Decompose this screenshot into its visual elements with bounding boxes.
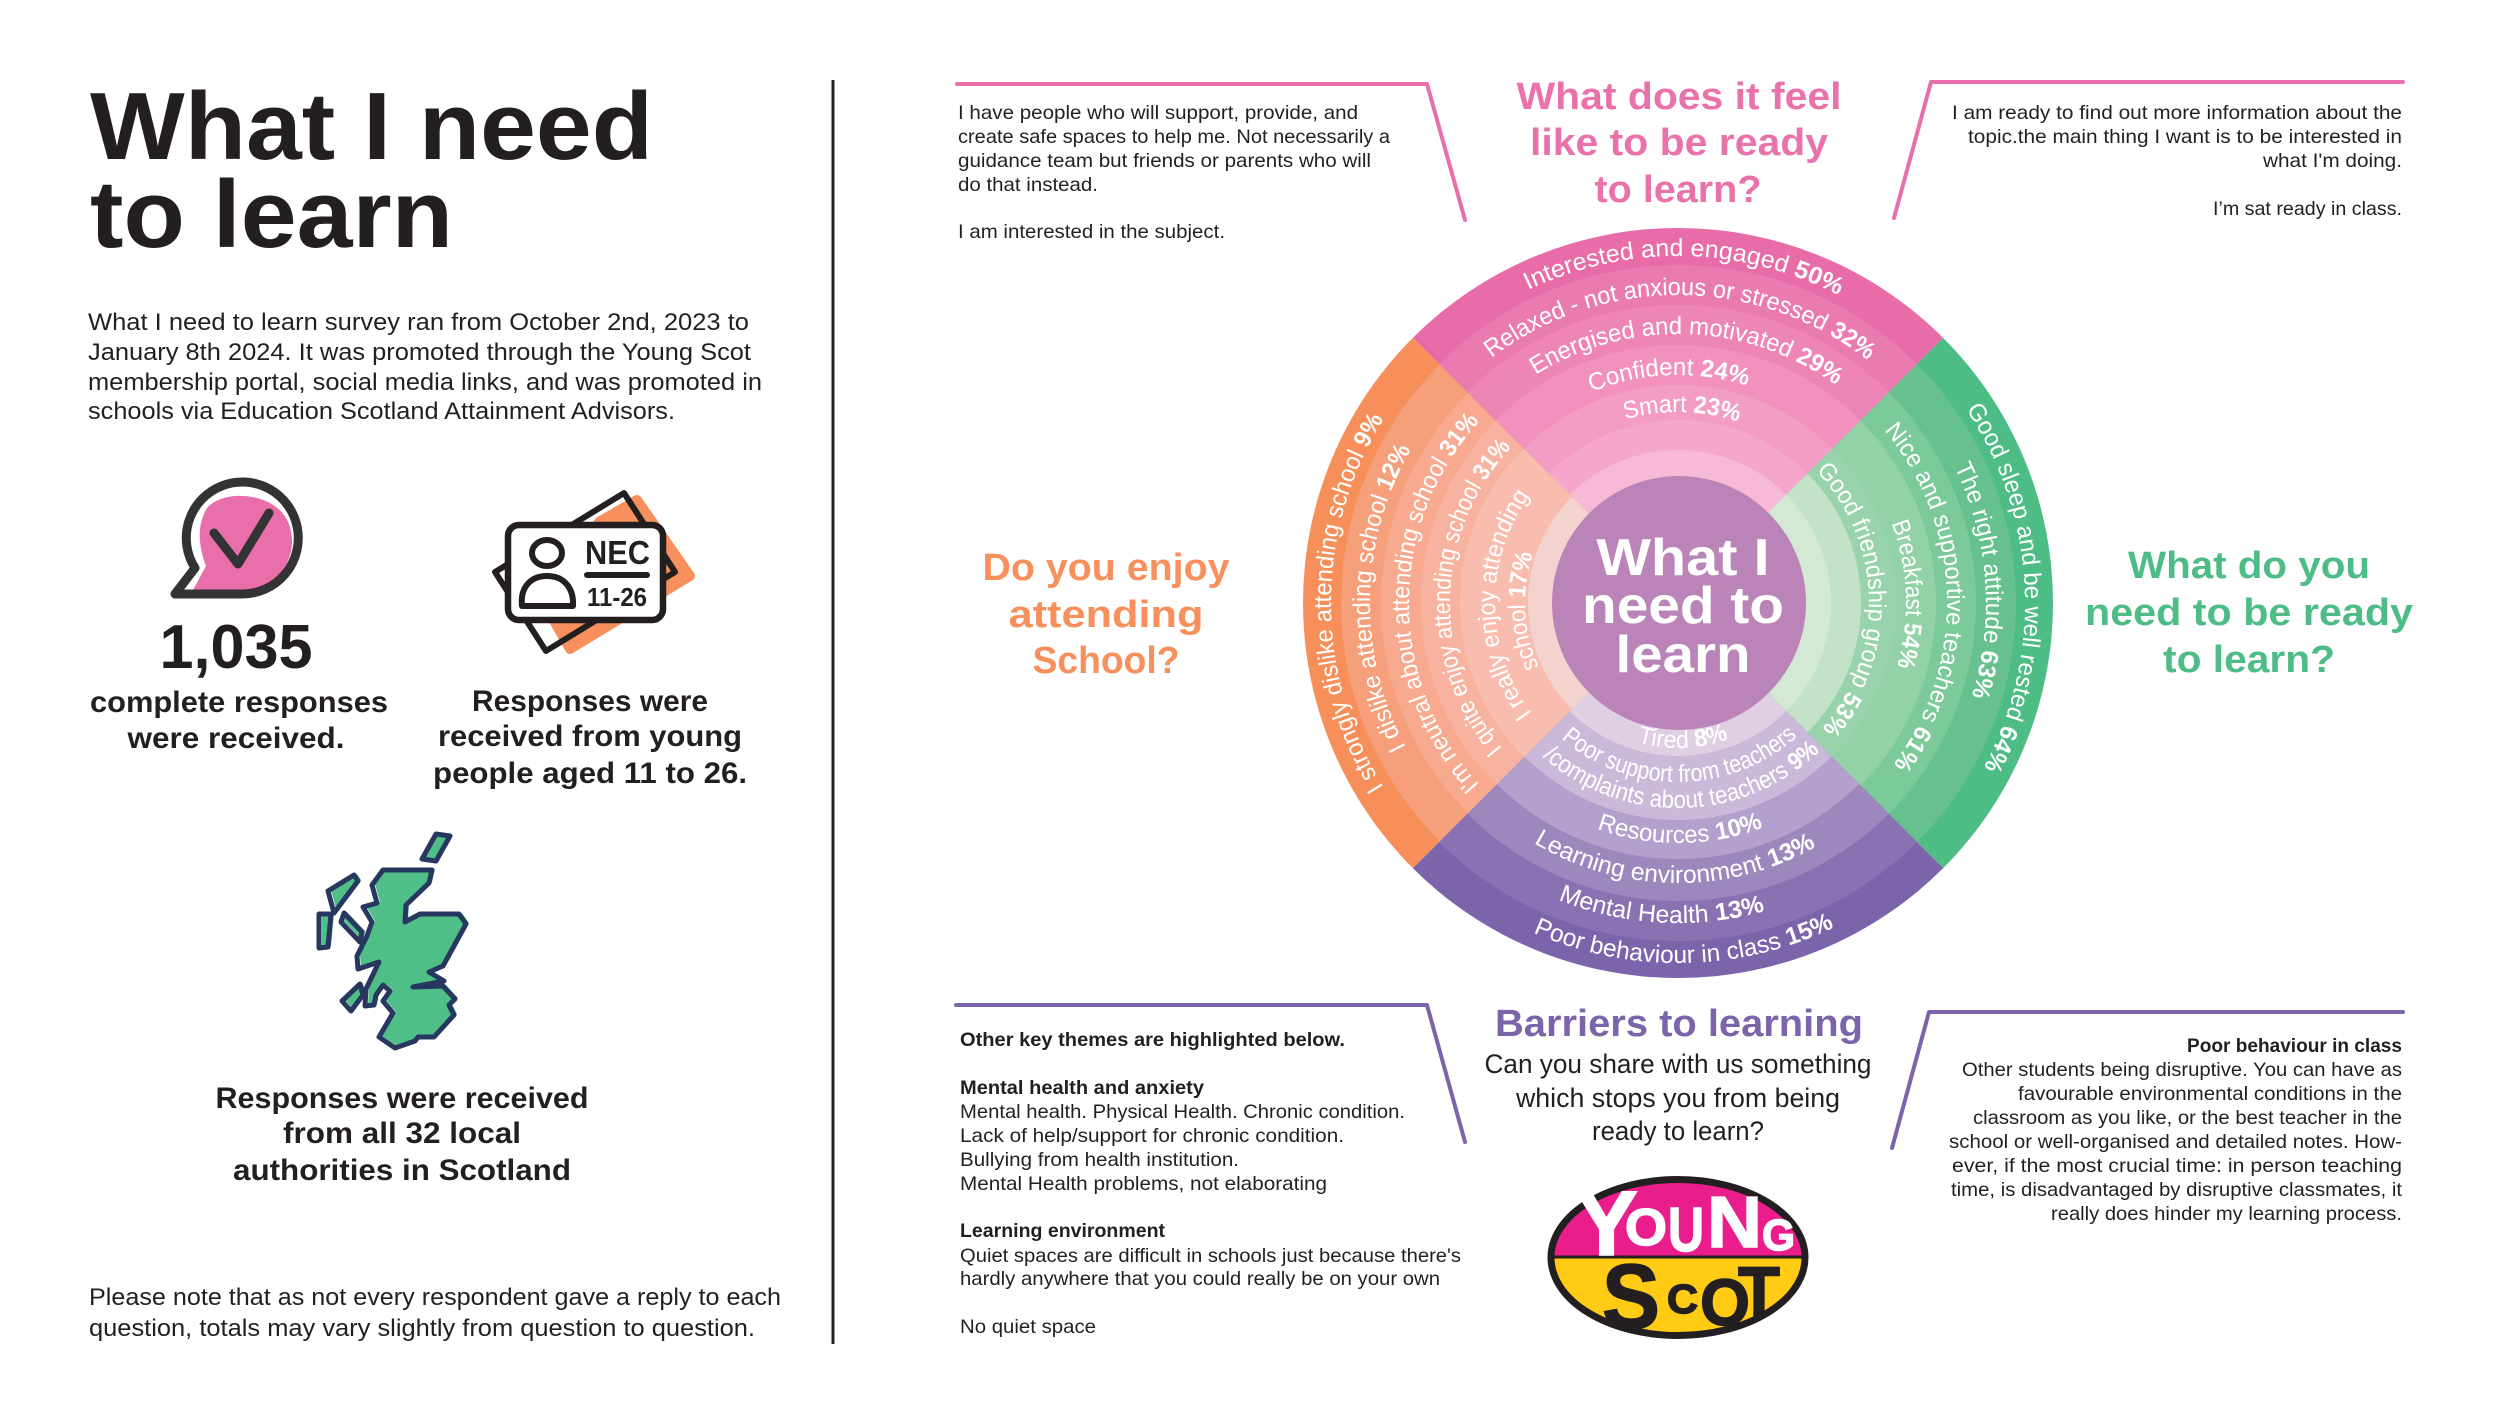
quote callout: top right: what I'm doing. [2262, 150, 2402, 172]
statistic: age range: received from young [438, 720, 742, 753]
icon: young scot age card: 11-26 [587, 582, 647, 612]
callout: other key themes: Other key themes are highlighted below. [960, 1029, 1345, 1051]
heading: barriers to learning [1484, 1003, 1872, 1146]
logo: young scot: O [1700, 1265, 1750, 1339]
heading: barriers to learning: Can you share with us something [1484, 1049, 1872, 1079]
labels: orange segment: I quite enjoy attending school 31% [1433, 439, 1510, 758]
callout: other key themes: hardly anywhere that you could really be on your own [960, 1268, 1440, 1290]
callout: poor behaviour quote: really does hinder my learning process. [2051, 1203, 2402, 1225]
labels: purple segment: Resources 10% [1598, 812, 1762, 844]
labels: pink segment [1483, 238, 1875, 421]
labels: orange segment: school 17% [1507, 552, 1538, 670]
quote callout: top left: create safe spaces to help me. Not necessarily a [958, 126, 1390, 148]
labels: pink segment: Relaxed - not anxious or stressed 32% [1483, 278, 1875, 359]
callout: other key themes: Mental health. Physical Health. Chronic condition. [960, 1101, 1405, 1123]
labels: green segment [1820, 404, 2042, 772]
labels: green segment: Good sleep and be well rested 64% [1969, 404, 2042, 772]
labels: green segment: Good friendship group 53% [1820, 464, 1887, 736]
logo: young scot: N [1707, 1183, 1762, 1263]
statistic: complete responses: complete responses [90, 686, 388, 719]
callout: other key themes: Quiet spaces are difficult in schools just because there's [960, 1245, 1461, 1267]
quote callout: top right: topic.the main thing I want is to be interested in [1968, 126, 2402, 148]
heading: what do you need: What do you [2128, 545, 2370, 587]
labels: purple segment: Mental Health 13% [1560, 884, 1764, 924]
title: to learn [90, 161, 453, 268]
logo: young scot: Y [1575, 1173, 1638, 1275]
callout: other key themes: No quiet space [960, 1316, 1096, 1338]
heading: what do you need: to learn? [2163, 639, 2335, 681]
labels: orange segment: I dislike attending school 12% [1352, 445, 1410, 753]
labels: green segment: Breakfast 54% [1892, 519, 1923, 668]
quote callout: top right: I’m sat ready in class. [2213, 198, 2402, 220]
callout: other key themes: Learning environment [960, 1220, 1166, 1242]
title [90, 73, 653, 268]
labels: orange segment: I strongly dislike attending school 9% [1315, 414, 1383, 794]
callout: poor behaviour quote [1892, 1012, 2403, 1225]
segment: enjoy school (orange) [1303, 338, 1589, 868]
logo: young scot: S [1602, 1246, 1660, 1348]
intro paragraph: What I need to learn survey ran from October 2nd, 2023 to [88, 309, 749, 336]
labels: green segment: Nice and supportive teachers 61% [1886, 421, 1965, 771]
quote callout: top left: I have people who will support, provide, and [958, 102, 1358, 124]
footnote [89, 1284, 781, 1342]
callout: poor behaviour quote: classroom as you like, or the best teacher in the [1973, 1107, 2402, 1129]
icon: map of scotland [319, 833, 469, 1048]
heading: what does it feel like: to learn? [1594, 169, 1762, 211]
heading: do you enjoy attending school: Do you enjoy [982, 547, 1230, 589]
logo: young scot: O [1625, 1199, 1667, 1257]
logo: young scot [1545, 1173, 1811, 1348]
segment: barriers (purple) [1412, 692, 1944, 978]
heading: do you enjoy attending school: School? [1032, 640, 1180, 682]
center circle: learn [1616, 626, 1750, 684]
labels: purple segment: Poor support from teachers [1562, 726, 1796, 783]
title: What I need [90, 73, 653, 180]
callout: other key themes: Lack of help/support for chronic condition. [960, 1125, 1344, 1147]
intro paragraph: January 8th 2024. It was promoted through the Young Scot [88, 339, 751, 366]
callout: other key themes [956, 1005, 1465, 1338]
statistic: local authorities: from all 32 local [283, 1117, 521, 1150]
logo: young scot: C [1667, 1276, 1698, 1322]
center circle: need to [1582, 577, 1784, 635]
statistic: age range [433, 685, 747, 790]
heading: barriers to learning: ready to learn? [1592, 1116, 1764, 1146]
segment: feeling ready (pink) [1412, 228, 1944, 514]
labels: pink segment: Energised and motivated 29% [1528, 316, 1842, 384]
callout: other key themes: Bullying from health institution. [960, 1149, 1239, 1171]
intro paragraph: membership portal, social media links, and was promoted in [88, 369, 762, 396]
quote callout: top right [1894, 82, 2403, 220]
heading: what does it feel like [1516, 76, 1842, 211]
center circle: What I [1596, 529, 1770, 587]
statistic: local authorities: authorities in Scotland [233, 1154, 571, 1187]
intro paragraph: schools via Education Scotland Attainment Advisors. [88, 398, 675, 425]
labels: purple segment: Learning environment 13% [1536, 829, 1814, 883]
footnote: question, totals may vary slightly from question to question. [89, 1315, 755, 1342]
labels: orange segment: I really enjoy attending [1478, 490, 1532, 722]
callout: other key themes: Mental Health problems, not elaborating [960, 1173, 1327, 1195]
heading: what do you need: need to be ready [2085, 592, 2413, 634]
footnote: Please note that as not every respondent gave a reply to each [89, 1284, 781, 1311]
quote callout: top left: do that instead. [958, 174, 1098, 196]
labels: pink segment: Smart 23% [1624, 396, 1740, 421]
callout: poor behaviour quote: time, is disadvantaged by disruptive classmates, it [1951, 1179, 2403, 1201]
heading: what does it feel like: like to be ready [1530, 122, 1828, 164]
logo: young scot: G [1762, 1211, 1795, 1260]
logo: young scot: U [1668, 1196, 1704, 1265]
icon: young scot age card [495, 493, 690, 651]
callout: poor behaviour quote: Poor behaviour in class [2187, 1035, 2402, 1057]
statistic: local authorities: Responses were received [216, 1082, 588, 1115]
statistic: age range: people aged 11 to 26. [433, 757, 747, 790]
statistic: local authorities [216, 1082, 588, 1187]
callout: poor behaviour quote: school or well-organised and detailed notes. How- [1949, 1131, 2402, 1153]
heading: what does it feel like: What does it feel [1516, 76, 1842, 118]
labels: orange segment [1315, 413, 1538, 794]
chart: radial wheel [1303, 228, 2053, 978]
quote callout: top left: I am interested in the subject. [958, 221, 1225, 243]
callout: other key themes: Mental health and anxiety [960, 1077, 1204, 1099]
icon: young scot age card: NEC [585, 534, 650, 571]
labels: purple segment: Tired 8% [1641, 724, 1727, 748]
statistic: complete responses: were received. [126, 722, 344, 755]
labels: purple segment: Poor behaviour in class 15% [1534, 914, 1832, 964]
labels: purple segment: /complaints about teachers 9% [1542, 741, 1818, 808]
heading: do you enjoy attending school [982, 547, 1230, 682]
statistic: complete responses [90, 613, 388, 755]
labels: green segment: The right attitude 63% [1957, 460, 2004, 698]
center circle [1552, 476, 1806, 730]
quote callout: top left [957, 84, 1465, 243]
quote callout: top right: I am ready to find out more information about the [1952, 102, 2402, 124]
callout: poor behaviour quote: ever, if the most crucial time: in person teaching [1952, 1155, 2402, 1177]
statistic: complete responses: 1,035 [160, 613, 312, 682]
callout: poor behaviour quote: Other students being disruptive. You can have as [1962, 1059, 2402, 1081]
labels: pink segment: Confident 24% [1589, 358, 1748, 390]
statistic: age range: Responses were [472, 685, 708, 718]
logo: young scot: T [1738, 1253, 1780, 1334]
quote callout: top left: guidance team but friends or parents who will [958, 150, 1371, 172]
callout: poor behaviour quote: favourable environmental conditions in the [2018, 1083, 2402, 1105]
labels: pink segment: Interested and engaged 50% [1523, 238, 1842, 294]
panel: survey overview [88, 73, 781, 1342]
icon: speech bubble with check mark [175, 482, 298, 594]
labels: orange segment: I'm neutral about attending school 31% [1393, 413, 1478, 794]
heading: do you enjoy attending school: attending [1008, 594, 1204, 636]
heading: what do you need [2085, 545, 2413, 681]
intro paragraph [88, 309, 762, 425]
labels: purple segment [1534, 724, 1832, 964]
heading: barriers to learning: Barriers to learning [1495, 1003, 1863, 1045]
segment: what is needed (green) [1768, 338, 2053, 868]
heading: barriers to learning: which stops you from being [1515, 1083, 1840, 1113]
